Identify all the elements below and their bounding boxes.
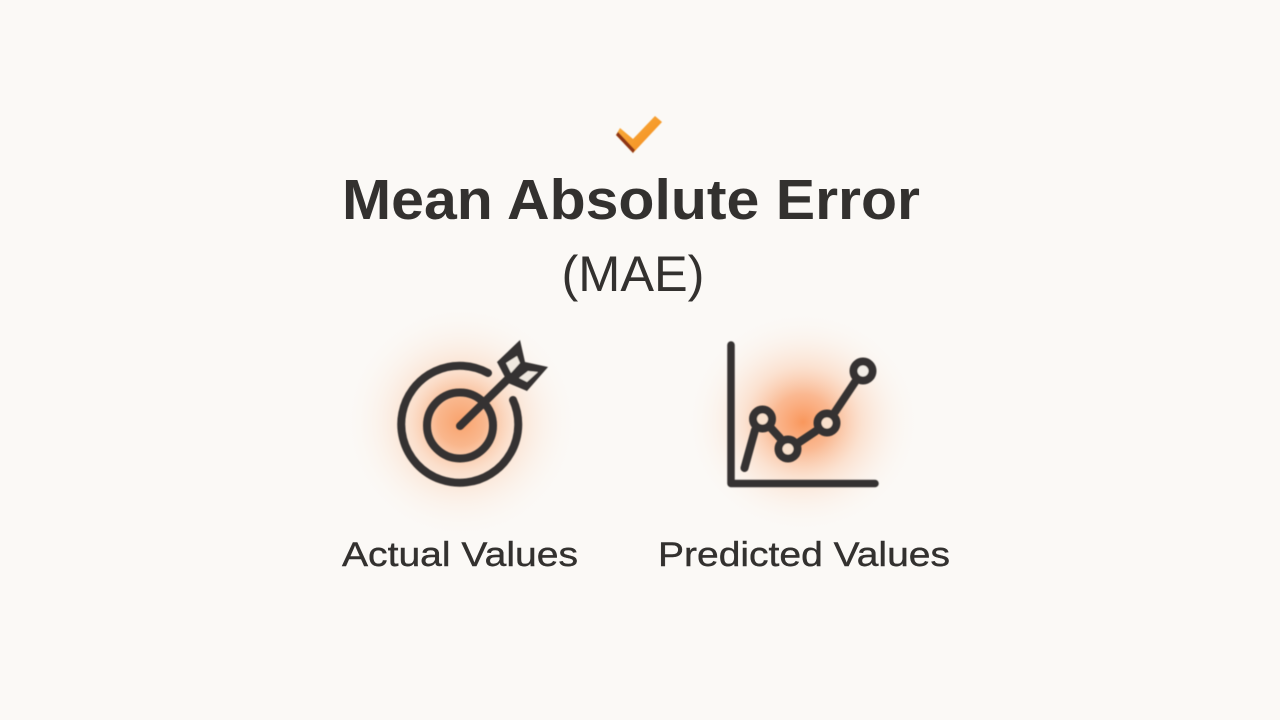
target outer ring [401, 366, 518, 483]
chart marks [731, 345, 875, 484]
label: predicted values: Predicted Values [658, 536, 950, 574]
target inner ring [427, 392, 493, 458]
chart line [744, 382, 855, 468]
arrow fletching [497, 340, 548, 391]
icon: check mark [616, 116, 662, 153]
icon: line chart [685, 310, 921, 534]
chart axes [731, 345, 875, 484]
icon: target with arrow [343, 304, 579, 540]
label: actual values: Actual Values [342, 536, 578, 574]
arrow shaft [460, 375, 512, 426]
target rings and arrow [401, 340, 548, 483]
chart points [753, 362, 872, 458]
subtitle: (MAE) [562, 246, 704, 302]
target glow [343, 304, 579, 540]
chart glow [685, 310, 921, 534]
title: Mean Absolute Error [342, 168, 920, 231]
